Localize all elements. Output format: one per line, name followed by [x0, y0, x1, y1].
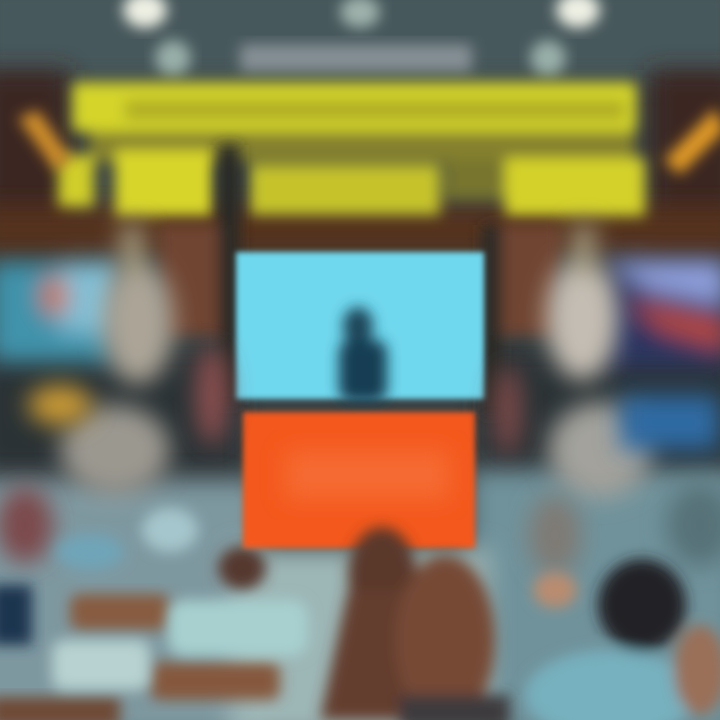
side accents: orange streaks [18, 108, 720, 175]
audience: seated crowd [0, 402, 720, 720]
pillars: wooden frame [160, 145, 560, 415]
ceiling lights [123, 0, 600, 76]
screen: center cyan [236, 252, 484, 399]
left screen [0, 262, 120, 362]
foreground: person with dark hair [525, 559, 720, 720]
statues: pale figures [28, 225, 618, 455]
top banner: grey strip [240, 44, 472, 72]
headline sign: yellow band [58, 82, 645, 216]
foreground: person with long brown hair [320, 527, 510, 720]
speaker silhouette [339, 307, 387, 402]
podium: orange panel [243, 412, 475, 548]
right screen [605, 258, 720, 450]
